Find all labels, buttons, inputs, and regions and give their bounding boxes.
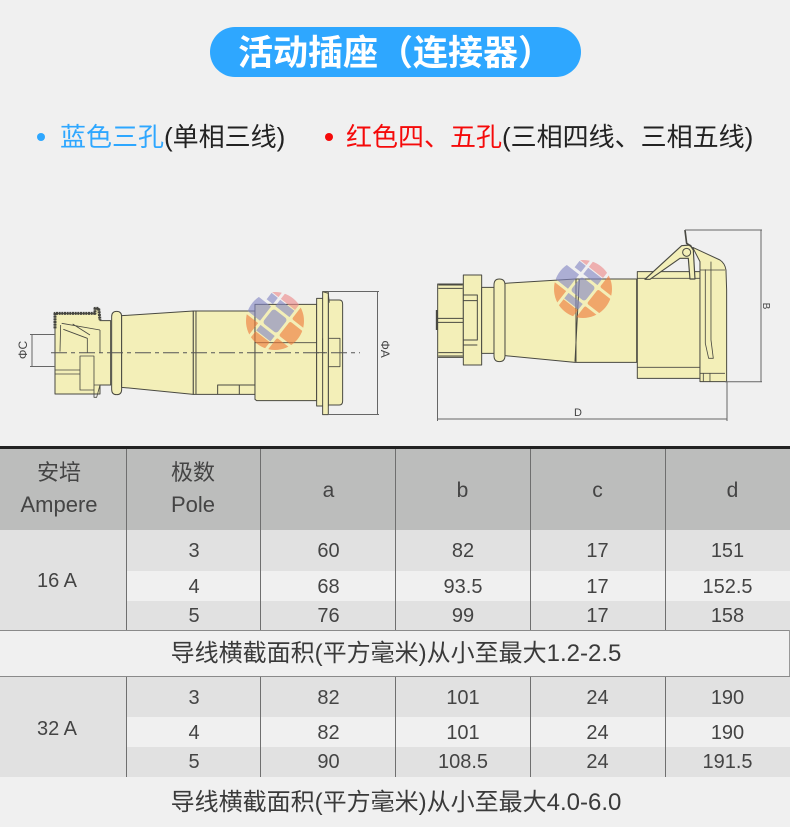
header: b: b — [457, 479, 468, 502]
drawing: connector front view with cover — [437, 230, 727, 382]
header: d: d — [727, 479, 738, 502]
32 A row pole 4 — [127, 717, 790, 747]
title pill — [210, 27, 581, 77]
16 A row pole 4: 152.5 — [702, 576, 753, 598]
16 A row pole 5: 99 — [452, 605, 474, 627]
16 A row pole 3 — [127, 530, 790, 571]
32 A row pole 5: 90 — [317, 751, 340, 773]
header: c: c — [592, 479, 603, 502]
16 A row pole 5: 158 — [711, 605, 744, 627]
header: ampere: Ampere — [20, 492, 98, 517]
32 A row pole 3: 24 — [586, 687, 609, 709]
32 A row pole 4: 24 — [586, 722, 609, 744]
32 A ampere cell: 32 A — [37, 718, 77, 740]
header: a: a — [323, 479, 334, 502]
16 A row pole 3: 3 — [188, 540, 200, 562]
label: phi C: ΦC — [16, 341, 30, 359]
32 A row pole 3: 190 — [711, 687, 744, 709]
technical drawings — [16, 230, 771, 421]
title pill: 活动插座（连接器） — [238, 34, 553, 73]
32 A row pole 3: 101 — [446, 687, 480, 709]
32 A row pole 5: 5 — [188, 751, 200, 773]
16 A row pole 4: 17 — [586, 576, 609, 598]
legend text: single phase: 蓝色三孔(单相三线) — [60, 122, 285, 152]
16 A row pole 5: 17 — [586, 605, 609, 627]
16 A row pole 3: 60 — [317, 540, 340, 562]
label: D: D — [574, 407, 582, 419]
watermark: left logo — [246, 292, 304, 350]
16 A ampere cell: 16 A — [37, 570, 77, 592]
drawing: connector side view with diameters — [55, 292, 343, 415]
legend: blue three-hole — [37, 122, 285, 152]
icon: red bullet — [325, 133, 333, 141]
table top rule — [0, 446, 790, 449]
16 A row pole 5: 5 — [188, 605, 200, 627]
32 A conductor cross-section note: 导线横截面积(平方毫米)从小至最大4.0-6.0 — [171, 789, 621, 816]
16 A row pole 4: 68 — [317, 576, 340, 598]
legend text: three phase: 红色四、五孔(三相四线、三相五线) — [346, 122, 753, 152]
32 A row pole 4: 82 — [317, 722, 340, 744]
16 A row pole 4: 4 — [188, 576, 200, 598]
32 A row pole 3 — [127, 677, 790, 717]
16 A row pole 3: 17 — [586, 540, 609, 562]
32 A row pole 4: 101 — [446, 722, 480, 744]
32 A row pole 5: 191.5 — [702, 751, 753, 773]
32 A row pole 3: 3 — [188, 687, 200, 709]
16 A conductor cross-section note: 导线横截面积(平方毫米)从小至最大1.2-2.5 — [171, 640, 621, 667]
32 A ampere cell — [0, 677, 126, 777]
16 A row pole 5 — [127, 601, 790, 631]
header: pole: 极数 — [171, 460, 215, 485]
16 A row pole 3: 151 — [711, 540, 744, 562]
32 A row pole 4: 190 — [711, 722, 744, 744]
16 A row pole 4: 93.5 — [444, 576, 482, 598]
label: phi A: ΦA — [378, 340, 392, 358]
32 A row pole 4: 4 — [188, 722, 200, 744]
32 A row pole 5: 24 — [586, 751, 609, 773]
label: B: B — [760, 303, 771, 310]
header: pole — [171, 460, 215, 517]
header: pole: Pole — [171, 492, 215, 517]
watermark: right logo — [554, 260, 612, 318]
32 A row pole 3: 82 — [317, 687, 340, 709]
dimension: phi C — [16, 334, 55, 366]
header: ampere: 安培 — [37, 460, 81, 485]
table header — [0, 449, 790, 530]
16 A ampere cell — [0, 530, 126, 630]
icon: blue bullet — [37, 133, 45, 141]
legend: red four and five-hole — [325, 122, 753, 152]
16 A row pole 5: 76 — [317, 605, 340, 627]
dimensions: B and D — [438, 230, 771, 421]
header: ampere — [20, 460, 98, 517]
16 A row pole 4 — [127, 571, 790, 601]
32 A row pole 5: 108.5 — [438, 751, 488, 773]
drawing: centerline — [51, 352, 360, 354]
32 A row pole 5 — [127, 747, 790, 777]
dimension: phi A — [328, 292, 392, 414]
16 A row pole 3: 82 — [452, 540, 474, 562]
